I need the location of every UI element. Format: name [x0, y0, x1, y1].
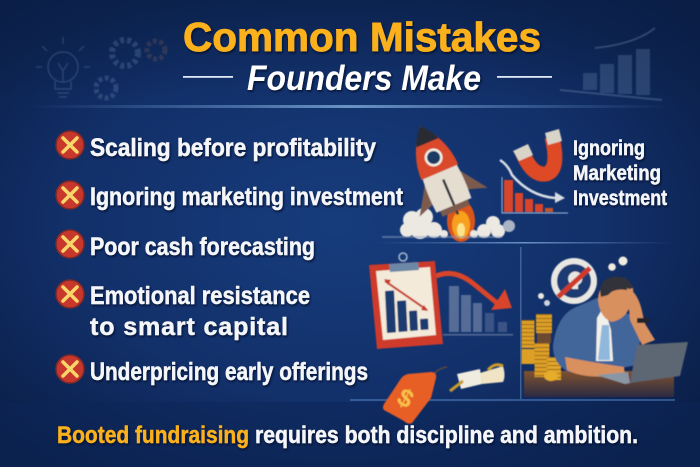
item: emotional resistance to smart capital [56, 280, 310, 341]
item: underpricing early offerings: Underpricing early offerings [90, 358, 368, 386]
item: underpricing early offerings [56, 355, 368, 386]
item: emotional resistance to smart capital: to smart capital [90, 313, 288, 341]
item: emotional resistance to smart capital: Emotional resistance [90, 282, 310, 310]
icon: gold coin stacks [528, 314, 554, 380]
label: ignoring marketing investment [573, 137, 667, 210]
icon: red downward arrow [436, 273, 512, 310]
icon: founder figure [553, 276, 655, 377]
icon: table [524, 371, 674, 397]
mistake list [56, 131, 404, 386]
icon: declining red bars [502, 177, 568, 213]
item: ignoring marketing investment: Ignoring marketing investment [90, 183, 404, 211]
illustration: stressed founder at laptop [524, 256, 688, 397]
item: scaling before profitability: Scaling before profitability [90, 134, 376, 162]
illustration: rocket [382, 111, 515, 242]
icon: smoke clouds [400, 208, 515, 239]
takeaway line [57, 422, 638, 449]
illustration: magnet and falling chart [500, 129, 568, 213]
label: ignoring marketing investment: Investment [573, 187, 667, 210]
subtitle: Founders Make [247, 59, 481, 98]
illustration: price tag and cash hand [383, 365, 504, 424]
icon: hand holding banknote [450, 365, 504, 391]
label: ignoring marketing investment: Ignoring [573, 137, 645, 160]
icon: falling white arrow [500, 160, 565, 203]
icon: exhaust flame [447, 200, 475, 242]
icon: clipboard [369, 253, 443, 349]
icon: no-idea thought bubble [538, 256, 628, 306]
item: poor cash forecasting [56, 230, 315, 261]
icon: faint light bulb and gears [36, 37, 165, 98]
takeaway line: Booted fundraising [57, 422, 249, 449]
illustration: cash forecast clipboard [369, 253, 513, 349]
icon: faded bar chart [443, 286, 513, 336]
icon: laptop [596, 342, 688, 384]
icon: price tag: $ [393, 383, 418, 414]
icon: horseshoe magnet [513, 129, 562, 174]
title: Common Mistakes [183, 14, 541, 60]
icon: rocket body [387, 111, 493, 229]
item: poor cash forecasting: Poor cash forecasting [90, 233, 315, 261]
takeaway line: requires both discipline and ambition. [255, 422, 638, 449]
icon: faint growth chart [560, 28, 662, 100]
label: ignoring marketing investment: Marketing [573, 162, 661, 185]
